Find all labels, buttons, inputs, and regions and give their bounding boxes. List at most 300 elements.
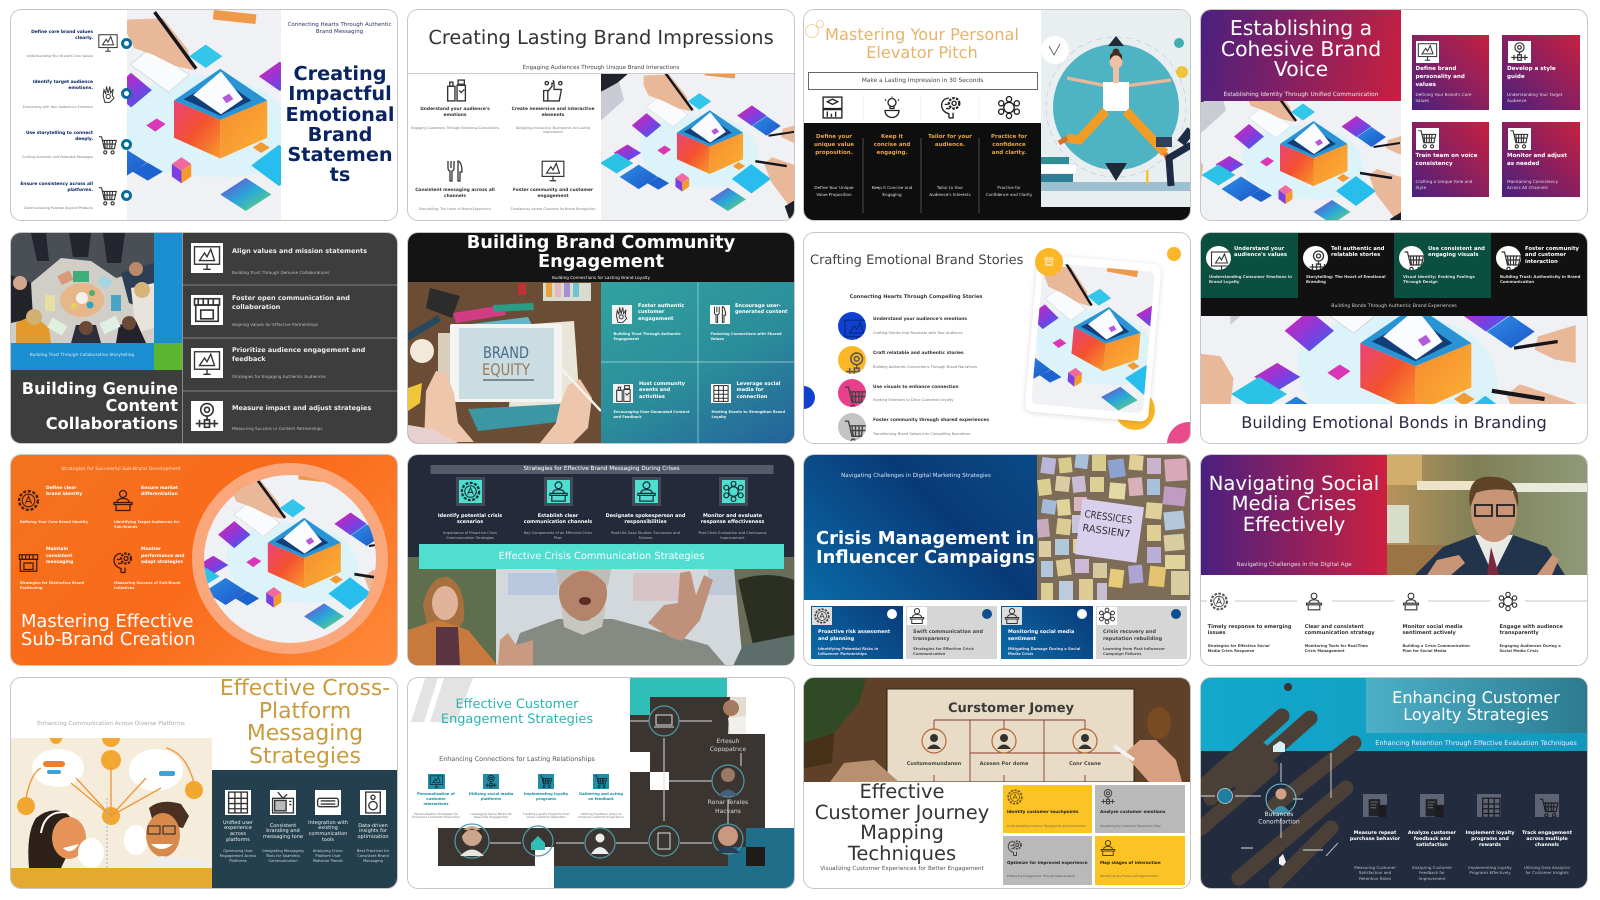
- title: Cohesive Brand: [1221, 36, 1381, 60]
- strategy 2 note: Real-Time Engagement: [474, 815, 508, 819]
- metric 4 text: Track engagement: [1522, 830, 1572, 836]
- step 2 ring: [121, 88, 132, 99]
- panel 1 note: Influencer Partnerships: [818, 652, 867, 656]
- panel 4 icon: [1508, 128, 1531, 150]
- subtitle: [288, 22, 392, 35]
- panel 2 text: guide: [1507, 74, 1525, 80]
- panel 4 icon: [1496, 246, 1521, 270]
- cell 3 note: [614, 410, 689, 420]
- panel 1 note: [1416, 92, 1472, 104]
- panel 2 text: Develop a style: [1507, 66, 1556, 72]
- step 3 note: [1402, 644, 1470, 654]
- decorative rings: [805, 20, 824, 38]
- column 3 note: Behavior Trends: [313, 859, 343, 863]
- row 1 icon: [191, 242, 223, 272]
- subtitle: Navigating Challenges in the Digital Age: [1236, 562, 1352, 568]
- step 2 note: Keep It Concise and: [872, 185, 912, 190]
- metric 4 text: across multiple: [1526, 837, 1568, 842]
- column 4 note: Best Practices for: [357, 849, 389, 853]
- row 4 note: Measuring Success in Content Partnerships: [232, 426, 322, 430]
- step 1 text: Timely response to emerging: [1208, 624, 1292, 630]
- cell 3 text: activities: [639, 394, 665, 400]
- panel 1 note: [818, 647, 878, 656]
- column 1 text: Unified user: [223, 820, 253, 826]
- column 1 text: [223, 820, 253, 843]
- step 4 text: platforms.: [67, 188, 93, 193]
- panel 3: [1001, 606, 1093, 659]
- accent circle: small yellow: [1167, 246, 1181, 260]
- step 2 text: communication strategy: [1305, 630, 1375, 636]
- panel 2 text: Tell authentic and: [1331, 246, 1384, 252]
- item 3 note: Positioning: [20, 586, 43, 590]
- panel 1 text: Define brand: [1416, 66, 1456, 72]
- panel 3 text: [1428, 246, 1485, 259]
- step 2 icon: [102, 86, 115, 103]
- item 3 note: Strategies for Distinctive Brand: [20, 581, 84, 585]
- cell 4 text: [736, 380, 780, 401]
- step 2 note: Monitoring Tools for Real-Time: [1305, 644, 1368, 648]
- panel 1 icon: [1416, 41, 1439, 63]
- title: Statemen: [287, 143, 393, 166]
- cell 3 text: events and: [639, 387, 670, 393]
- step 1 note: [1208, 644, 1270, 654]
- panel 2 note: [1507, 92, 1562, 104]
- strategy 4 note: Improve Customer Experience: [578, 815, 624, 819]
- green block: [154, 342, 183, 370]
- metric 4 note: for Customer Insights: [1525, 870, 1569, 875]
- step 3 text: sentiment actively: [1402, 630, 1456, 636]
- bullet 3 note: Evoking Emotions to Drive Customer Loyalty: [873, 398, 953, 402]
- panel 2 text: transparency: [913, 636, 950, 642]
- step 1 text: Define your: [816, 134, 852, 140]
- panel 2 icon: [1303, 246, 1328, 270]
- slide: Building Emotional Bonds in Branding: [1201, 232, 1587, 442]
- row 2 icon: [191, 294, 223, 324]
- image: customer journey chart on a desk: Curstomer Jomey: [948, 700, 1075, 716]
- subtitle: Navigating Challenges in Digital Marketing Strategies: [841, 473, 991, 479]
- step 3 ring: [121, 139, 132, 150]
- panel 3 text: sentiment: [1008, 636, 1036, 642]
- tile 1 text: Identify customer touchpoints: [1007, 808, 1078, 814]
- panel 4 note: [1500, 274, 1580, 284]
- row 2 note: Aligning Values for Effective Partnerships: [232, 322, 318, 326]
- tile 2: [1095, 784, 1185, 832]
- step 4 note: Practice for: [997, 185, 1021, 190]
- metric 4 text: [1522, 830, 1572, 849]
- column 2 text: [263, 824, 303, 841]
- bullet 1 heading: Understand your audience's emotions: [873, 316, 967, 322]
- metric 3 text: [1465, 830, 1515, 849]
- title panel: [1366, 678, 1587, 732]
- step 2 text: concise and: [874, 142, 910, 148]
- panel 4 note: Maintaining Consistency: [1507, 179, 1558, 184]
- step 4 text: Engage with audience: [1500, 624, 1563, 630]
- item 3 note: [20, 581, 84, 591]
- panel 4 note: Learning from Past Influencer: [1103, 647, 1165, 651]
- accent circle: blue: [792, 386, 815, 408]
- panel 4: [1502, 122, 1580, 197]
- cell 1 text: [638, 302, 685, 323]
- image: woman jumping in teal circle: [1041, 10, 1190, 207]
- title: Engagement: [538, 251, 664, 272]
- image: isometric brand box: [601, 74, 794, 220]
- row 4 icon: [191, 400, 223, 430]
- step 4 text: confidence: [992, 142, 1026, 148]
- step 3 note: Crafting Authentic and Relatable Messages: [22, 155, 93, 159]
- strategy 1 text: Personalization of: [417, 792, 455, 796]
- step 1 note: Media Crisis Response: [1208, 649, 1254, 653]
- item 4 note: Consistency Across Channels for Brand Recognition: [511, 207, 595, 211]
- step 1 text: Identify potential crisis: [438, 513, 502, 519]
- strategy 1 text: customer: [426, 797, 446, 801]
- panel 4 note: Across All Channels: [1507, 185, 1548, 190]
- step 3 icon: [632, 477, 660, 506]
- item 1 text: brand identity: [46, 492, 82, 497]
- row 2 heading: collaboration: [232, 303, 280, 311]
- column 2 icon: [270, 790, 296, 814]
- item 1 text: [46, 486, 82, 498]
- image: tablet showing Brand Equity: [408, 282, 601, 442]
- column 1 note: [220, 849, 256, 864]
- item 2 note: [114, 520, 179, 530]
- slide: Building Brand Community Engagement: [408, 232, 794, 442]
- item 1 text: emotions: [444, 113, 466, 118]
- panel 3 text: [1008, 629, 1074, 642]
- item 2 text: differentiation: [141, 492, 178, 497]
- title: Customer Journey: [815, 800, 989, 824]
- step 3 text: Designate spokesperson and: [606, 513, 685, 519]
- step 2 icon: [1304, 591, 1324, 612]
- subtitle: Enhancing Connections for Lasting Relationships: [439, 754, 595, 762]
- image: customer journey chart on a desk: Acesen Por dome: [980, 760, 1029, 766]
- tile 3: [1002, 836, 1092, 884]
- column dividers: [862, 95, 980, 213]
- item 2 text: Ensure market: [141, 486, 178, 491]
- item 3 text: Consistent messaging across all: [415, 188, 495, 193]
- item 3 note: Storytelling: The Heart of Brand Experience: [419, 207, 491, 211]
- cell 4 note: [712, 410, 785, 420]
- title: [441, 697, 593, 727]
- black lower band: [804, 123, 1190, 220]
- strategy 1 note: Personalization Strategies for: [414, 812, 458, 816]
- panel 1 button: [887, 609, 897, 619]
- top strip: [430, 465, 773, 474]
- panel 3 note: Media Crisis: [1008, 652, 1033, 656]
- framed image: isometric brand box: [1024, 253, 1162, 422]
- tile 2 text: Analyze customer emotions: [1100, 808, 1165, 814]
- panel 1: [811, 606, 903, 659]
- slide: Creating Impactful Emotional Brand Statements: [11, 10, 397, 220]
- step 1 note: Define Your Unique: [814, 185, 854, 190]
- header band: [1201, 10, 1401, 101]
- item 3 text: [415, 188, 495, 199]
- item 4 note: Measuring Success of Sub-Brand: [114, 581, 180, 585]
- row 3 note: Strategies for Engaging Authentic Audiences: [232, 374, 326, 378]
- step 4 icon: [1497, 591, 1519, 612]
- step 1 icon: [456, 477, 485, 506]
- column and row rules: [182, 232, 398, 444]
- panel 3 button: [1077, 609, 1087, 619]
- panel 4 text: [1103, 629, 1162, 642]
- slide: Crisis Management in Influencer Campaigns: [804, 455, 1190, 665]
- tile 4 note: Identifying Key Points and Opportunities: [1100, 874, 1158, 878]
- item 1 text: Define clear: [46, 486, 76, 491]
- strategy 1 note: [412, 813, 460, 820]
- step 1 text: proposition.: [815, 150, 853, 156]
- title: Engagement Strategies: [441, 712, 593, 727]
- panel 1 icon: [1206, 246, 1231, 270]
- panel 4 text: Foster community: [1525, 246, 1579, 252]
- metric 1 text: [1350, 830, 1400, 843]
- title: Media Crises: [1232, 492, 1356, 515]
- step 3 note: Failures: [639, 536, 652, 540]
- column 3 text: Integration with: [308, 820, 348, 826]
- item 2 icon: [111, 488, 135, 513]
- panel 2 icon: [907, 607, 927, 625]
- subtitle: Connecting Hearts Through Compelling Stories: [850, 294, 982, 300]
- panel 2: [906, 606, 997, 659]
- cell 2 icon: [710, 304, 730, 324]
- metric 2 text: Analyze customer: [1408, 830, 1456, 836]
- image: diagonal stripes network: [1201, 678, 1401, 888]
- cell 1 icon: [612, 304, 632, 324]
- panel 3 note: Crafting a Unique Tone and: [1416, 179, 1472, 184]
- title: Building Emotional Bonds in Branding: [1241, 412, 1547, 432]
- panel 2: [1502, 35, 1580, 110]
- metric 2 note: Analyzing Customer: [1412, 865, 1452, 870]
- panel 2 text: [1507, 65, 1556, 81]
- panel 4 button: [1171, 609, 1181, 619]
- metric 1 note: [1354, 865, 1396, 881]
- panel 1 text: and planning: [818, 636, 854, 642]
- column 4 text: [357, 824, 389, 841]
- strategy 4 text: Gathering and acting: [579, 792, 623, 796]
- step 3 note: Tailor to Your: [937, 185, 963, 190]
- step 3 note: Plan for Social Media: [1402, 649, 1446, 653]
- panel 1: [1412, 35, 1489, 110]
- column 3 text: tools: [322, 837, 334, 843]
- step 4 text: [991, 134, 1027, 156]
- cell 1 text: Foster authentic: [638, 302, 685, 308]
- metric 2 text: [1408, 830, 1456, 849]
- metric 4 note: Utilizing Data Analytics: [1524, 865, 1570, 870]
- slide: Crafting Emotional Brand Stories: [804, 232, 1190, 442]
- step 1 ring: [121, 38, 132, 49]
- panel 1 icon: [812, 607, 832, 625]
- item 4 text: [141, 547, 184, 566]
- cell 2 text: [735, 302, 788, 316]
- panel 1 note: [1209, 274, 1292, 284]
- image: wall of sticky notes: CRESSICES: [1084, 509, 1133, 527]
- title: [815, 782, 989, 864]
- step 3 note: Audience's Interests: [929, 192, 971, 196]
- item 2 note: [516, 126, 590, 134]
- title: Techniques: [848, 842, 956, 864]
- panel rules: [601, 282, 795, 444]
- title: Platform: [259, 699, 351, 724]
- panel 4 note: Communication: [1500, 279, 1534, 284]
- title: [825, 24, 1019, 62]
- item 4 note: Initiatives: [114, 586, 134, 590]
- panel 1 text: personality and: [1416, 74, 1465, 80]
- item 3 text: messaging: [46, 560, 73, 565]
- column 1 note: Optimizing User: [223, 849, 253, 853]
- item 3 text: [46, 547, 73, 566]
- column 1 note: Engagement Across: [220, 854, 256, 858]
- title: Navigating Social: [1209, 472, 1379, 495]
- slide: Building Genuine Content Collaborations: [11, 232, 397, 442]
- step icon 3: [940, 97, 960, 119]
- step 3 text: Tailor for your: [928, 134, 972, 140]
- row 3 heading: feedback: [232, 355, 266, 363]
- blue sidebar: [154, 232, 183, 342]
- item 2 note: Designing Interactive Touchpoints for Lasting: [516, 126, 590, 130]
- step 1 text: clearly.: [75, 36, 93, 41]
- image: customer journey chart on a desk: Conr Csane: [1069, 760, 1102, 766]
- step 1 text: issues: [1208, 630, 1226, 636]
- step 2 text: [524, 513, 592, 526]
- panel 2 note: Strategies for Effective Crisis: [913, 647, 974, 651]
- panel 3 note: [1403, 274, 1475, 284]
- panel 4 text: as needed: [1507, 161, 1539, 167]
- cell 4 icon: [710, 384, 730, 402]
- column 1 text: across: [230, 831, 246, 837]
- subtitle: Engaging Audiences Through Unique Brand Interactions: [523, 65, 679, 71]
- slide: Establishing a Cohesive Brand Voice: [1201, 10, 1587, 220]
- bullet 4 circle: [838, 412, 866, 440]
- tile 4 text: Map stages of interaction: [1100, 860, 1161, 864]
- column 1 note: Platforms: [229, 859, 247, 863]
- title: Effective: [859, 780, 945, 803]
- item 2 note: Identifying Target Audiences for: [114, 520, 179, 524]
- strategy 4 note: Utilizing Feedback Loops to: [580, 812, 622, 816]
- step icon 2: [884, 96, 900, 118]
- panel 2 note: Communication: [913, 652, 945, 656]
- image: network of people and devices: [408, 678, 794, 888]
- step 2 text: Identify target audience: [33, 80, 93, 85]
- step 1 text: [814, 134, 854, 156]
- subtitle: Building Connections for Lasting Brand Loyalty: [552, 275, 650, 280]
- caption: Building Trust Through Collaborative Storytelling: [30, 353, 134, 358]
- step 4 ring: [121, 190, 132, 201]
- bullet 2 circle: [838, 346, 866, 374]
- panel 4 note: [1507, 179, 1558, 191]
- slide: Effective Customer Engagement Strategies: [408, 678, 794, 888]
- slide: Effective Cross-Platform Messaging Strategies: [11, 678, 397, 888]
- strategy 4 note: [578, 813, 624, 820]
- item 1 text: [420, 106, 490, 118]
- column 4 text: insights for: [359, 828, 387, 834]
- column 4 text: Data-driven: [358, 822, 388, 828]
- step 4 note: Social Media Crisis: [1500, 649, 1538, 653]
- row 1 note: Building Trust Through Genuine Collaborations: [232, 270, 329, 274]
- metric 3 icon: [1477, 794, 1501, 816]
- connector rules: [1201, 600, 1588, 602]
- step 4 note: Improvement: [720, 536, 745, 540]
- cell 1 note: [614, 332, 681, 342]
- step 2 text: Clear and consistent: [1305, 624, 1364, 630]
- panel 3 text: Train team on voice: [1416, 153, 1477, 159]
- cell 3 icon: [613, 384, 633, 402]
- cell 3 text: [639, 380, 685, 401]
- dark band: [1201, 232, 1587, 316]
- step 3 note: Building a Crisis Communication: [1402, 644, 1470, 648]
- step 3 note: Real-Life Case Studies: Successes and: [611, 530, 680, 534]
- panel 2 note: Branding: [1306, 279, 1326, 284]
- metric 1 note: Measuring Customer: [1354, 865, 1396, 870]
- step 1 note: [443, 530, 497, 541]
- panel 1 text: [1416, 66, 1465, 88]
- step 2 text: emotions.: [68, 86, 93, 91]
- step 3 note: [611, 530, 680, 541]
- panel 3 icon: [1416, 128, 1439, 150]
- title: Effectively: [1243, 513, 1345, 536]
- panel 4 text: and customer: [1525, 252, 1566, 258]
- panel 2 icon: [1508, 41, 1531, 63]
- title: Brand: [308, 123, 372, 146]
- metric 1 note: Retention Rates: [1359, 876, 1391, 881]
- step 3 text: Monitor social media: [1402, 624, 1463, 630]
- title: Content: [105, 396, 178, 415]
- slide: Navigating Social Media Crises Effectively: [1201, 455, 1587, 665]
- step 4 icon: [98, 187, 117, 206]
- step 3 text: [606, 513, 685, 526]
- tile 1: [1002, 784, 1092, 832]
- item 4 text: Monitor: [141, 547, 161, 552]
- strategy 3 note: [523, 813, 569, 820]
- column 4 text: optimization: [357, 834, 389, 840]
- step 2 note: [1305, 644, 1368, 654]
- item 3 icon: [447, 160, 463, 182]
- panel 2 text: [1331, 246, 1384, 259]
- title: Collaborations: [46, 414, 178, 432]
- tile 1 icon: [1005, 788, 1025, 806]
- item 4 text: engagement: [537, 194, 569, 199]
- title: Elevator Pitch: [866, 43, 978, 62]
- metric 2 text: feedback and: [1414, 837, 1450, 842]
- column 2 note: Integrating Messaging: [262, 849, 304, 853]
- title: Establishing a: [1230, 16, 1372, 40]
- panel 1 note: Values: [1416, 98, 1429, 103]
- step 4 text: transparently: [1500, 630, 1539, 636]
- panel 4 note: Campaign Failures: [1103, 652, 1141, 656]
- metric 4 text: channels: [1535, 843, 1559, 848]
- title: Effective Customer: [456, 697, 578, 712]
- panel 2 note: [1306, 274, 1386, 284]
- image: network of people and devices: Ertesuh: [716, 738, 740, 744]
- step 3 text: [26, 130, 93, 142]
- subtitle: Connecting Hearts Through Authentic: [288, 22, 391, 28]
- panel 4 text: [1525, 246, 1579, 266]
- step 1 note: [814, 185, 854, 197]
- item 1 icon: [447, 79, 466, 102]
- title: [816, 528, 1035, 566]
- panel 4 text: interaction: [1525, 259, 1558, 265]
- column 2 text: messaging tone: [263, 834, 303, 840]
- image: man gesturing in argument: [408, 557, 794, 665]
- image: isometric brand box: [127, 10, 281, 220]
- item 2 text: Create immersive and interactive: [512, 107, 594, 112]
- column 2 note: Tools for Seamless: [266, 854, 300, 858]
- step 4 icon: [718, 477, 748, 506]
- strategy 3 text: programs: [536, 797, 556, 801]
- image: network of people and devices: Hacvans: [715, 808, 741, 814]
- tile 3 note: Enhancing Engagement Through Data Analysis: [1007, 874, 1075, 878]
- panel 1 text: audience's values: [1234, 252, 1287, 258]
- gold strip: [11, 868, 212, 888]
- title: [1392, 689, 1560, 723]
- panel 2 note: Storytelling: The Heart of Emotional: [1306, 274, 1386, 279]
